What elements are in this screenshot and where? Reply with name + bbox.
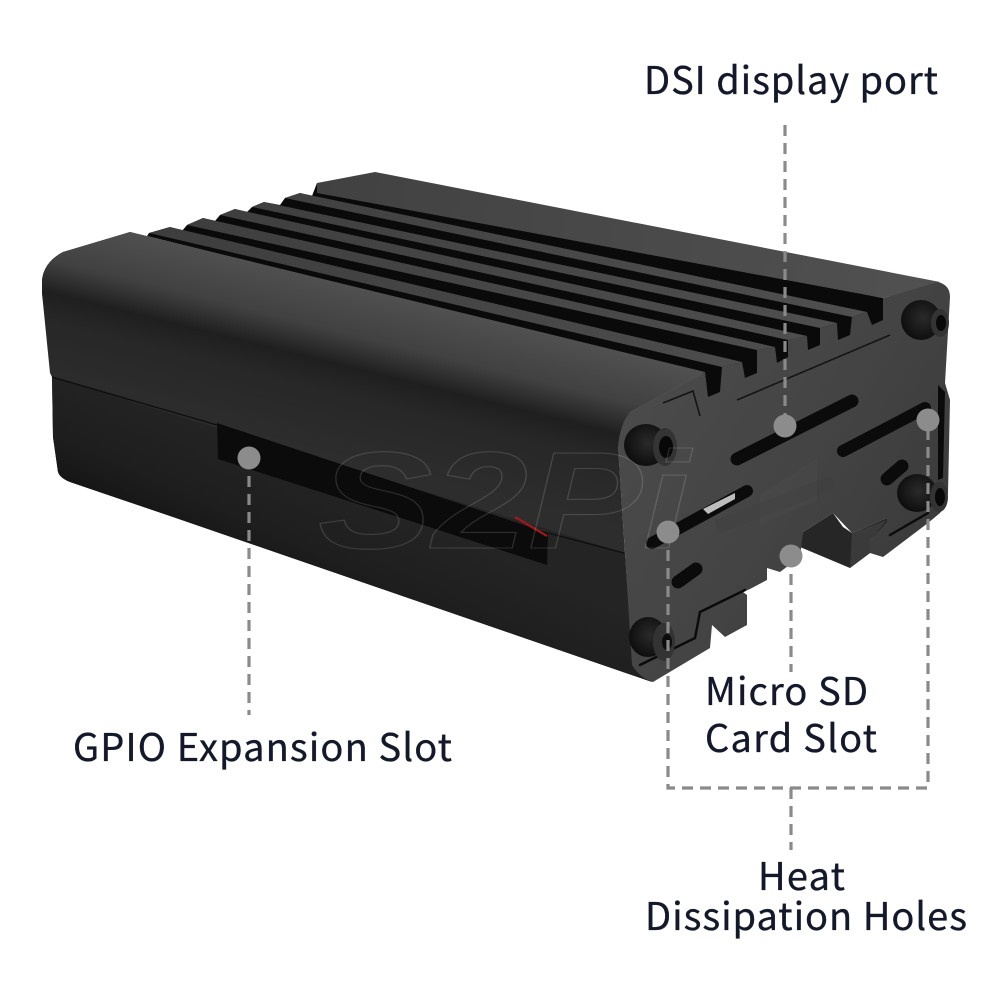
heat sink ribs — [149, 172, 940, 367]
line: heat holes stem — [789, 788, 793, 850]
label: Heat Dissipation Holes: Heat — [758, 846, 845, 901]
case base silhouette — [42, 232, 705, 682]
bottom tab groove — [640, 513, 928, 665]
panel lighter window — [760, 458, 817, 525]
screw top right — [901, 300, 949, 340]
rib 6 rear — [317, 172, 940, 298]
label: Micro SD Card Slot — [705, 661, 877, 763]
line: heat holes bracket — [668, 420, 928, 788]
rib 3 — [220, 209, 807, 340]
panel cut-outs — [640, 401, 928, 665]
line: GPIO — [247, 458, 251, 715]
panel connector strip — [717, 482, 833, 527]
end panel — [618, 282, 950, 682]
seam line — [52, 377, 624, 553]
product: aluminium case — [42, 172, 950, 682]
dot: DSI — [774, 414, 796, 438]
line: DSI — [783, 125, 787, 426]
rib 1 — [149, 227, 742, 367]
small left slot — [678, 569, 696, 582]
label: Micro SD Card Slot: Micro SD — [705, 661, 868, 716]
inner block below panel — [800, 513, 887, 568]
screw top left — [624, 424, 677, 466]
dot: Micro SD — [780, 544, 802, 568]
rib 4 — [252, 202, 837, 328]
white card glimpse — [703, 493, 735, 514]
case lower side — [52, 377, 652, 682]
case upper side and rounded top — [42, 232, 705, 554]
red wire — [515, 517, 547, 536]
rib 5 — [285, 193, 867, 317]
label: Heat Dissipation Holes — [645, 846, 967, 941]
dot: heat right — [916, 408, 940, 432]
small right slot — [887, 466, 902, 479]
right edge gap — [938, 385, 945, 480]
panel dark marks — [663, 335, 890, 416]
dot: heat left — [656, 520, 680, 544]
marker dots — [238, 408, 940, 568]
label: Micro SD Card Slot: Card Slot — [705, 708, 877, 763]
left slot — [652, 491, 747, 543]
DSI slot — [737, 401, 852, 459]
screw bottom left — [629, 617, 675, 661]
screw bottom right — [897, 474, 948, 512]
right slot — [843, 408, 925, 451]
label: DSI display port: DSI display port — [644, 50, 938, 105]
top slots background — [147, 183, 883, 400]
callout lines — [249, 125, 928, 850]
inner block lit face — [850, 520, 887, 568]
GPIO slot — [217, 423, 548, 565]
dot: GPIO — [238, 446, 260, 470]
watermark: S2Pi — [318, 424, 693, 578]
label: Heat Dissipation Holes: Dissipation Holes — [645, 886, 967, 941]
rib 2 — [187, 218, 775, 350]
screws — [624, 300, 949, 661]
label: GPIO Expansion Slot: GPIO Expansion Slot — [73, 717, 452, 772]
line: Micro SD — [789, 556, 793, 672]
